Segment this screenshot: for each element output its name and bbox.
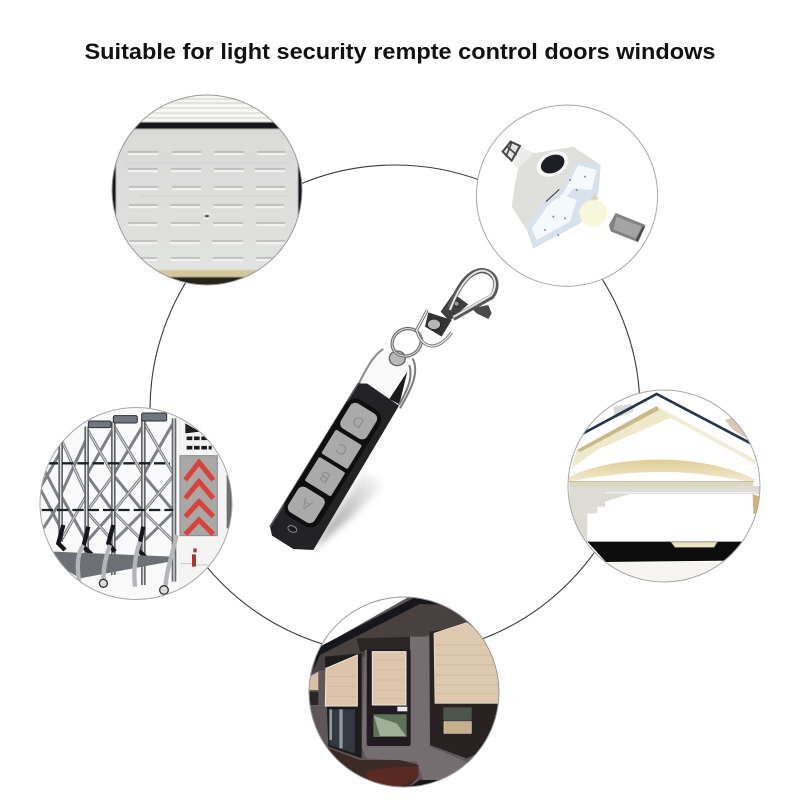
sensor window [533,146,573,182]
black door frame [108,122,306,220]
cast shadow [312,472,383,550]
panel seams [125,163,290,196]
roller slats above the door [142,96,272,122]
door panel [110,128,305,272]
eyelet [389,351,405,366]
sky above roof [322,598,408,646]
metal keyring plate [358,349,417,409]
window frames [325,653,362,758]
roller door circle outline [568,390,760,582]
button D [338,401,379,442]
fob body [270,383,399,550]
dark right edge [226,475,232,528]
clasp thumb tab [472,305,492,319]
red information mark [192,548,197,567]
light wall [362,637,467,780]
driveway [606,562,722,582]
roof edge [578,394,751,443]
photo: window shutters [310,598,498,786]
connecting ring [150,165,640,655]
door handle [671,542,717,547]
product: four-button remote key fob [270,271,496,550]
photo: retractable gate [41,409,232,595]
small remote [609,213,646,242]
shutter slats [328,645,498,698]
button B: B [317,467,334,485]
far left shutter [308,672,318,690]
embossed door ribs [128,152,285,258]
photo: garage door [108,93,306,287]
clasp plate [441,293,468,321]
black door base [587,542,745,562]
shutter circle outline [309,597,499,787]
bulb screw base [503,142,535,170]
right window glass [443,707,472,721]
indicator LED [287,524,298,534]
clasp hook [449,271,496,318]
handles on post tops [88,413,167,428]
centre window glass [373,714,407,737]
bottom rails and wheels [53,535,177,594]
lower black links [58,525,147,558]
split ring [387,323,426,361]
soffit [572,406,672,468]
wooden sill and floor [156,270,258,278]
button well [280,394,385,532]
button A [286,484,327,525]
button D: D [350,411,367,431]
lattice diagonals [40,422,174,542]
centre shutter [372,652,406,705]
button C [321,429,362,469]
LED panel [527,162,601,248]
wall shade behind door [569,486,760,543]
door lock [204,212,210,220]
bulb housing [512,147,601,248]
sky corners behind roof [613,404,633,418]
low wall and planter [313,745,418,797]
right shutter [434,623,503,703]
curved lintel [568,460,755,483]
right post [752,494,759,514]
control post [178,535,179,538]
eaves [312,604,471,673]
left window glass [329,709,355,753]
swivel [425,312,452,337]
photo: cream roller door [567,387,763,583]
garage circle outline [112,95,302,285]
vertical posts [61,418,174,585]
button B [305,457,345,497]
dark cross rails [42,463,173,510]
yellow glow [579,200,607,227]
D ring [417,310,452,346]
button C: C [333,439,351,458]
gate circle outline [40,408,232,600]
button A: A [298,494,315,513]
chevron panel [180,456,217,536]
left shutter [325,655,357,706]
title: Suitable for light security rempte control doors windows [84,39,716,64]
photo: remote control light bulb [476,105,658,286]
lintel lip [569,481,753,486]
